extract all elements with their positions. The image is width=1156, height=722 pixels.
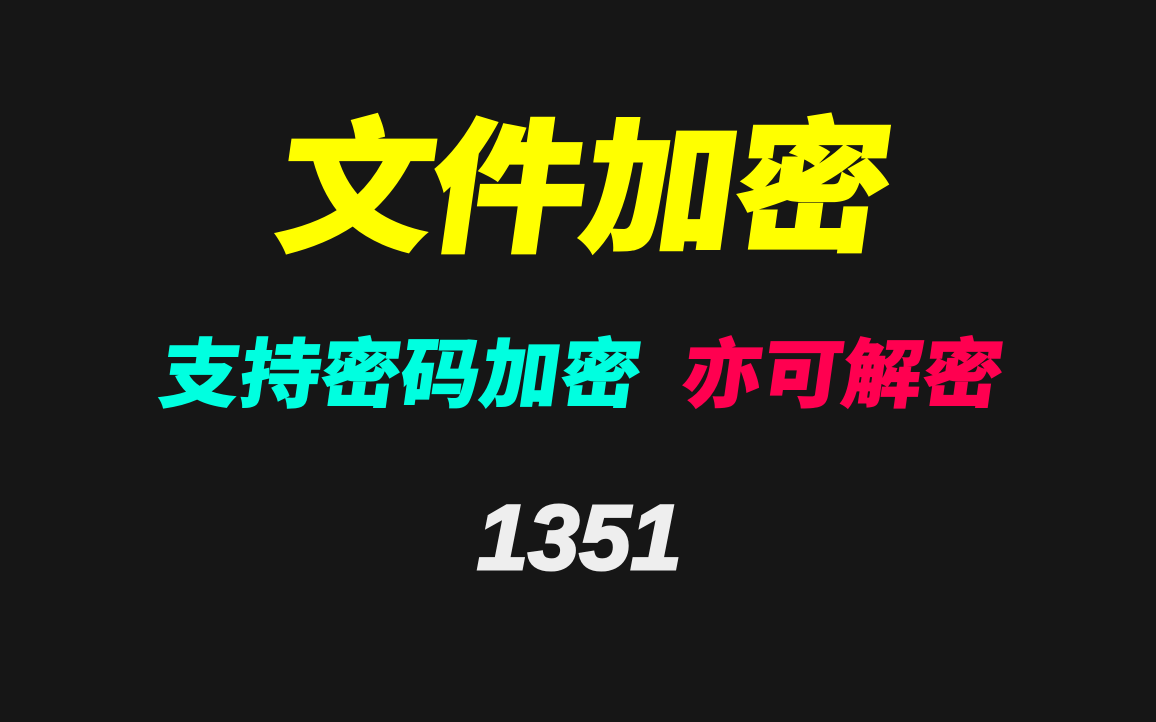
title: 文件加密 bbox=[267, 110, 898, 271]
number label: 1351 bbox=[477, 487, 682, 589]
subtitle: decryption: 亦可解密 bbox=[677, 333, 1009, 417]
subtitle: password encryption: 支持密码加密 bbox=[155, 333, 647, 417]
